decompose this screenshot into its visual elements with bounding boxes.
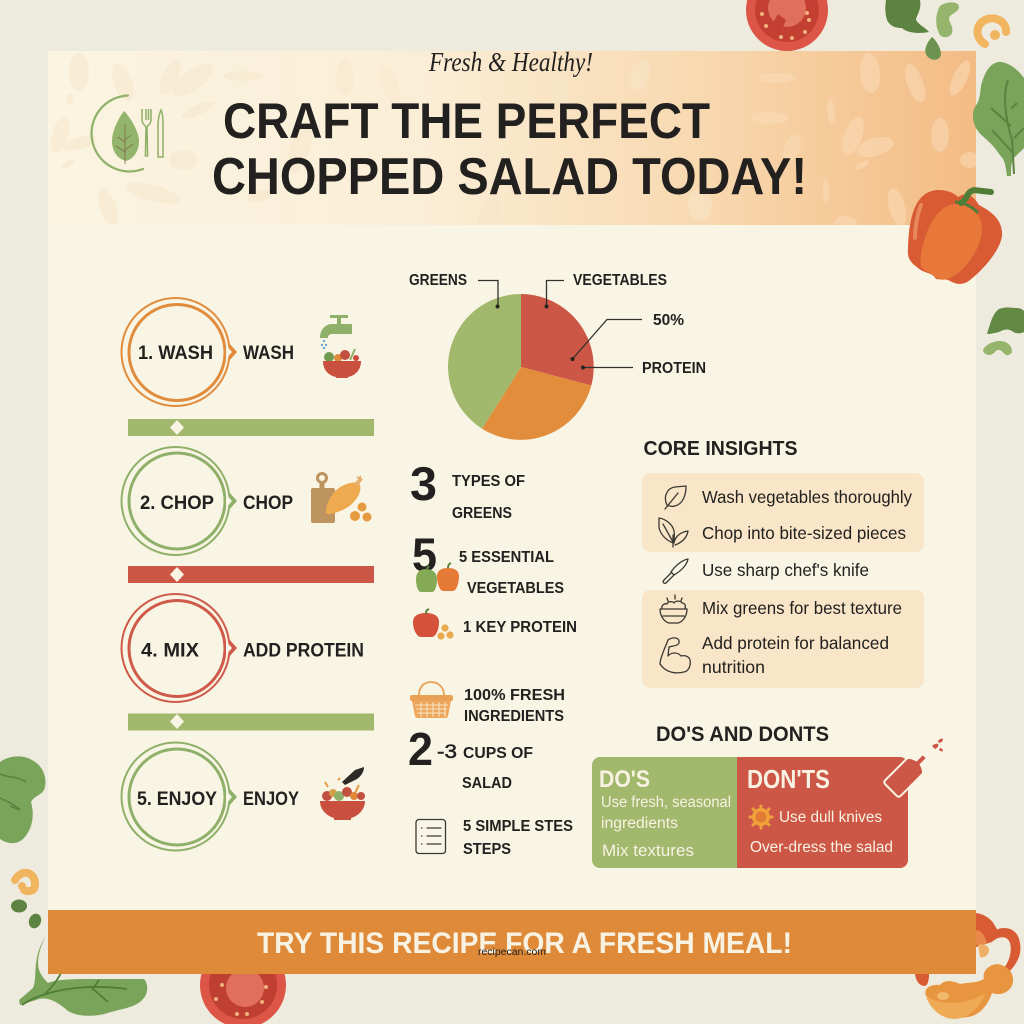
stat: 100% fresh: INGREDIENTS <box>464 708 564 725</box>
icon: faucet over bowl <box>320 315 361 378</box>
icon: leaf and cutlery logo <box>92 96 163 171</box>
icon: dressing bottle <box>883 739 943 798</box>
heading: do's and donts: DO'S AND DONTS <box>656 723 829 746</box>
panel: core insights list <box>642 473 924 688</box>
stat: 5 essential vegetables: 5 <box>412 528 437 581</box>
decoration: spinach leaf right <box>973 62 1024 176</box>
icon: checklist <box>416 820 446 854</box>
panel: core insights list: Add protein for balanced <box>702 633 889 653</box>
stat: 2-3 cups of salad <box>408 723 533 792</box>
stat: 2-3 cups of salad: -3 <box>437 742 457 763</box>
stat: 2-3 cups of salad: SALAD <box>462 775 512 792</box>
decoration: spinach bottom left <box>0 756 46 843</box>
step 5: enjoy: ENJOY <box>243 789 299 810</box>
stat: 3 types of greens: TYPES OF <box>452 473 525 490</box>
step 4: mix <box>122 594 364 702</box>
stat: 5 essential vegetables: VEGETABLES <box>467 580 564 597</box>
decoration: herb drop over header <box>925 37 941 60</box>
panel: core insights list: Use sharp chef's knife <box>702 560 869 580</box>
stat: 100% fresh <box>410 682 565 725</box>
step 5: enjoy <box>122 742 365 850</box>
step 4: mix: 4. MIX <box>141 640 199 662</box>
panel: do's: ingredients <box>601 815 678 832</box>
stat: 2-3 cups of salad: 2 <box>408 723 433 775</box>
icon: basket <box>410 682 453 718</box>
pie labels and leaders <box>409 272 706 377</box>
icon: board and chicken <box>311 474 372 523</box>
decoration: spinach bottom <box>19 935 147 1016</box>
decoration: bell pepper <box>908 190 1002 284</box>
eyebrow: Fresh & Healthy: Fresh & Healthy! <box>428 47 593 77</box>
icon: two leaves outline <box>659 518 688 547</box>
step 5: enjoy: 5. ENJOY <box>137 789 217 810</box>
pie labels and leaders: PROTEIN <box>642 360 706 377</box>
panel: don'ts: Over-dress the salad <box>750 839 893 856</box>
stat: 3 types of greens <box>410 457 525 522</box>
step 1: wash: 1. WASH <box>138 343 213 364</box>
divider bar red <box>128 566 374 583</box>
step 2: chop <box>122 447 372 555</box>
panel: do's <box>592 757 737 868</box>
stat: 5 simple steps: STEPS <box>463 841 511 858</box>
icon: flexed arm <box>660 638 690 673</box>
icon: salad bowl outline <box>660 595 687 623</box>
icon: salad bowl and knife <box>320 767 365 820</box>
watermark: recipecan.com <box>478 947 546 958</box>
step 2: chop: CHOP <box>243 493 293 514</box>
heading: core insights: CORE INSIGHTS <box>644 438 798 460</box>
step 4: mix: ADD PROTEIN <box>243 640 364 662</box>
step 1: wash <box>122 298 361 406</box>
decoration: pepper slice and dressing bottom right <box>915 913 1020 1019</box>
panel: core insights list: nutrition <box>702 657 765 677</box>
banner: call to action: TRY THIS RECIPE FOR A FRESH MEAL! <box>257 927 792 960</box>
stat: 1 key protein <box>413 609 577 640</box>
title: CRAFT THE PERFECT <box>223 93 710 149</box>
stat: 3 types of greens: 3 <box>410 457 437 510</box>
panel: core insights list: Wash vegetables thoroughly <box>702 487 912 507</box>
panel: don'ts: Use dull knives <box>779 809 882 826</box>
stat: 2-3 cups of salad: CUPS OF <box>463 745 533 762</box>
icon: leaf outline <box>665 486 686 509</box>
pie chart <box>409 272 706 440</box>
panel: do's: Mix textures <box>602 842 694 860</box>
panel: core insights list: Mix greens for best texture <box>702 598 902 618</box>
divider bar green <box>128 419 374 436</box>
title <box>212 93 807 206</box>
panel: don'ts <box>737 739 943 868</box>
icon: chef knife <box>663 559 688 583</box>
decoration: herbs right <box>983 307 1024 355</box>
icon: two peppers <box>416 563 459 592</box>
stat: 5 simple steps <box>416 818 573 858</box>
panel: don'ts: DON'TS <box>747 764 830 794</box>
banner: call to action <box>48 910 976 974</box>
stat: 100% fresh: 100% FRESH <box>464 687 565 704</box>
stat: 5 essential vegetables: 5 ESSENTIAL <box>459 549 554 566</box>
step 1: wash: WASH <box>243 343 294 364</box>
pie labels and leaders: 50% <box>653 312 684 329</box>
pie labels and leaders: GREENS <box>409 272 467 289</box>
title: CHOPPED SALAD TODAY! <box>212 148 807 206</box>
divider bar green <box>128 714 374 730</box>
decoration: herbs and curls top right <box>885 0 1006 44</box>
panel: core insights list: Chop into bite-sized pieces <box>702 523 906 543</box>
decoration: tomato top <box>746 0 828 51</box>
icon: sunflower <box>750 806 772 828</box>
stat: 3 types of greens: GREENS <box>452 505 512 522</box>
panel: do's: Use fresh, seasonal <box>601 794 731 811</box>
panel: do's: DO'S <box>599 766 650 793</box>
stat: 5 essential vegetables <box>412 528 564 597</box>
stat: 5 simple steps: 5 SIMPLE STES <box>463 818 573 835</box>
icon: red pepper and seeds <box>413 609 454 640</box>
panel: header band <box>47 51 980 234</box>
step 2: chop: 2. CHOP <box>140 493 214 514</box>
pie labels and leaders: VEGETABLES <box>573 272 667 289</box>
stat: 1 key protein: 1 KEY PROTEIN <box>463 619 577 636</box>
decoration: curl and seeds left <box>11 873 43 930</box>
decoration: tomato bottom <box>200 942 286 1024</box>
